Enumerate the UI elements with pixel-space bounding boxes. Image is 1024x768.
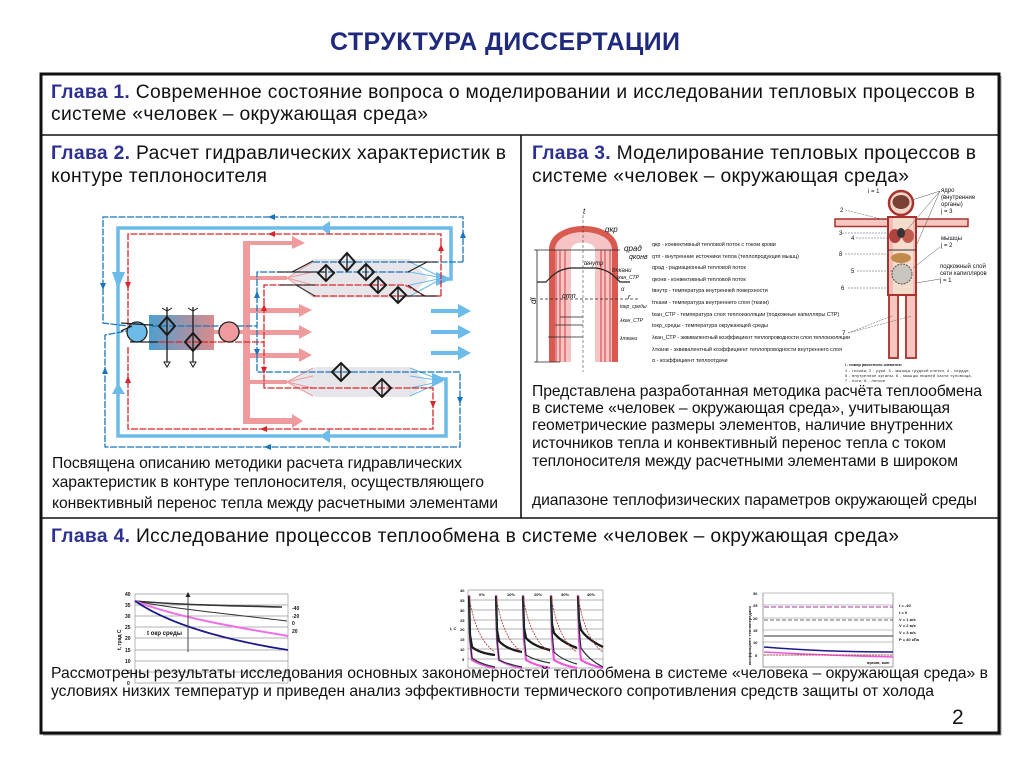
chapter 1 heading: системе «человек – окружающая среда»	[51, 104, 428, 125]
body labels: ядро	[941, 188, 955, 194]
body labels: 2	[840, 208, 844, 214]
chart: cooling curves by percent: 30	[460, 608, 465, 613]
chart: temperature vs time at ambient temperatures: 0	[292, 621, 295, 627]
figure labels: t	[583, 207, 586, 216]
chart: temperature vs time at ambient temperatures: 15	[125, 648, 131, 654]
chapter 3 heading	[532, 143, 976, 187]
human body model figure	[835, 188, 987, 383]
figure labels: qтп	[562, 293, 576, 300]
chapter 3 description: геометрические размеры элементов, наличие внутренних	[532, 417, 953, 434]
figure labels: tокр_среды	[620, 304, 647, 310]
chapter 2 heading: Глава 2. Расчет гидравлических характеристик в	[51, 143, 506, 164]
chart: cooling curves by percent: 10	[460, 647, 465, 652]
chapter 4 description	[51, 665, 988, 700]
hydraulic circuit diagram	[100, 214, 471, 450]
body labels: (внутренние	[941, 195, 976, 201]
chart: thermal resistance vs time: V = 1 м/с	[899, 617, 917, 622]
chart: temperature vs time at ambient temperatures: -20	[292, 614, 299, 620]
light blue return pipes	[118, 228, 451, 436]
chart: thermal resistance vs time: 5	[755, 653, 758, 658]
body labels: 8	[839, 252, 843, 258]
body labels: 6	[841, 286, 845, 292]
flow arrowheads	[100, 214, 466, 450]
chart: cooling curves by percent: 25	[460, 618, 465, 623]
chapter 3 description	[532, 383, 982, 509]
inlet and outlet connections	[162, 261, 437, 367]
body labels: 7	[842, 331, 846, 337]
chart: cooling curves by percent: 30%	[561, 592, 569, 597]
liver and intestines	[891, 253, 912, 284]
chart: cooling curves by percent	[450, 588, 603, 668]
legend of symbols: λкан_СТР - эквивалентный коэффициент теплопроводности слоя теплоизоляции	[652, 334, 850, 341]
legs	[889, 295, 916, 358]
valves	[159, 253, 406, 397]
arms	[835, 219, 968, 226]
body labels: 3	[839, 231, 843, 237]
element legend: 1 - голова, 2 - руки, 3 - мышцы грудной клетки, 4 - сердце,	[845, 369, 970, 373]
tube wall	[549, 226, 618, 362]
legend of symbols: qрад - радиационный тепловой поток	[652, 264, 747, 271]
legend of symbols: qкр - конвективный тепловой поток с током крови	[652, 241, 776, 248]
legend of symbols: α - коэффициент теплоотдачи	[652, 358, 728, 364]
chart: temperature vs time at ambient temperatures: 20	[125, 636, 131, 642]
element legend: 7 - ноги, 8 - легкие	[845, 379, 885, 383]
chart: cooling curves by percent: t, C	[450, 626, 457, 631]
pink and blue fine channels	[287, 262, 443, 396]
body labels: j = 2	[940, 243, 953, 249]
legend of symbols	[652, 241, 850, 364]
chart: temperature vs time at ambient temperatures	[117, 592, 299, 687]
blue heater gradient box	[149, 315, 214, 350]
chart: thermal resistance vs time	[747, 591, 920, 667]
body labels: 5	[851, 269, 855, 275]
chart: cooling curves by percent: 40	[460, 588, 465, 593]
chapter 3 description: Представлена разработанная методика расчёта теплообмена	[532, 383, 982, 400]
figure labels: qконв	[629, 254, 648, 261]
chapter 3 description: в системе «человек – окружающая среда», учитывающая	[532, 400, 950, 417]
chart: cooling curves by percent: 5	[462, 657, 465, 662]
title: СТРУКТУРА ДИССЕРТАЦИИ	[330, 28, 680, 56]
chapter 2 description: характеристик в контуре теплоносителя, осуществляющего	[52, 474, 484, 491]
chart: temperature vs time at ambient temperatures: t окр среды	[147, 631, 182, 637]
body labels	[839, 188, 987, 337]
chart: thermal resistance vs time: t = 0	[899, 610, 908, 615]
chapter 1 heading: Глава 1. Современное состояние вопроса о моделировании и исследовании тепловых процессов в	[51, 82, 975, 103]
figure labels: tткани	[612, 268, 632, 274]
chart: cooling curves by percent: 10%	[507, 592, 515, 597]
figure labels: tвнутр	[584, 261, 604, 267]
page number: 2	[952, 706, 964, 729]
chart: thermal resistance vs time: 25	[753, 603, 758, 608]
chart: thermal resistance vs time: V = 2 м/с	[899, 623, 917, 628]
chart: temperature vs time at ambient temperatures: 25	[125, 625, 131, 631]
figure labels: r	[628, 294, 631, 301]
chart: thermal resistance vs time: 30	[753, 591, 758, 596]
legend of symbols: tвнутр - температура внутренней поверхности	[652, 287, 768, 294]
body labels: j = 1	[939, 278, 952, 284]
chart: temperature vs time at ambient temperatures: 35	[125, 603, 131, 609]
legend of symbols: qтп - внутренние источники тепла (теплопродукция мышц)	[652, 254, 799, 260]
figure labels: qкр	[605, 225, 618, 234]
blue dashed loops	[103, 217, 463, 447]
chart: thermal resistance vs time: время, мин	[867, 660, 890, 665]
chart: thermal resistance vs time: V = 3 м/с	[899, 630, 917, 635]
legend of symbols: λткани - эквивалентный коэффициент теплопроводности внутреннего слоя	[652, 346, 842, 353]
chart: thermal resistance vs time: t = -40	[899, 603, 911, 608]
chart: temperature vs time at ambient temperatures: 5	[127, 670, 130, 676]
chapter 4 heading: Глава 4. Исследование процессов теплообмена в системе «человек – окружающая среда»	[51, 526, 899, 547]
body labels: подкожный слой	[940, 263, 986, 270]
chart: cooling curves by percent: 40%	[587, 592, 595, 597]
body labels: органы)	[941, 202, 963, 208]
body labels: сети капилляров	[940, 271, 987, 277]
chapter 2 description: конвективный перенос тепла между расчетными элементами	[52, 495, 498, 512]
chart: cooling curves by percent: 15	[460, 637, 465, 642]
chart: thermal resistance vs time: 15	[753, 628, 758, 633]
chapter 3 description: диапазоне теплофизических параметров окружающей среды	[532, 492, 977, 509]
chart: temperature vs time at ambient temperatures: -40	[292, 606, 299, 612]
figure labels	[529, 207, 648, 342]
chart: cooling curves by percent: 35	[460, 598, 465, 603]
chart: temperature vs time at ambient temperatures: 20	[292, 629, 298, 635]
circulation pumps	[121, 322, 239, 342]
figure labels: qрад	[624, 244, 642, 253]
chart: temperature vs time at ambient temperatures: t, град С	[117, 629, 123, 650]
wall cross-section figure	[529, 207, 648, 372]
chapter 3 heading: Глава 3. Моделирование тепловых процессов в	[532, 143, 976, 164]
gray heat exchanger zones	[287, 259, 428, 397]
body labels: мышцы	[941, 236, 962, 242]
chapter 3 heading: системе «человек – окружающая среда»	[532, 166, 909, 187]
figure labels: λкан_СТР	[619, 318, 644, 324]
chart: thermal resistance vs time: коэффициент теплопередачи	[747, 606, 752, 665]
leader lines	[842, 191, 940, 333]
chart: thermal resistance vs time: 10	[753, 640, 758, 645]
head with brain	[889, 191, 913, 215]
element legend	[845, 363, 972, 383]
chart: temperature vs time at ambient temperatures: 30	[125, 614, 131, 620]
chart: cooling curves by percent: 0%	[479, 592, 485, 597]
chapter 2 heading: контуре теплоносителя	[51, 166, 267, 187]
figure labels: λткани	[619, 336, 638, 342]
chapter 4 description: условиях низких температур и приведен анализ эффективности термического сопротивления средств защиты от холода	[51, 683, 934, 700]
light blue arrows	[112, 221, 471, 443]
chapter 2 heading	[51, 143, 506, 187]
pink supply pipes	[214, 236, 312, 428]
figure labels: dl	[529, 298, 538, 304]
chart: thermal resistance vs time: 20	[753, 616, 758, 621]
legend of symbols: tкан_СТР - температура слоя теплоизоляции (подкожные капилляры СТР)	[652, 312, 839, 318]
body labels: j = 3	[940, 209, 953, 215]
chart: thermal resistance vs time: P = 40 кПа	[899, 637, 920, 642]
body labels: 4	[851, 236, 855, 242]
chart: cooling curves by percent: 20%	[534, 592, 542, 597]
body labels: i = 1	[868, 189, 880, 195]
chart: cooling curves by percent: 20	[460, 627, 465, 632]
chapter 2 description: Посвящена описанию методики расчета гидравлических	[52, 455, 462, 472]
chapter 3 description: источников тепла и конвективный перенос тепла с током	[532, 435, 946, 452]
legend of symbols: qконв - конвективный тепловой поток	[652, 276, 746, 283]
chapter 4 description: Рассмотрены результаты исследования основных закономерностей теплообмена в системе «человека – окружающая среда» в	[51, 665, 988, 682]
legend of symbols: tокр_среды - температура окружающей среды	[652, 322, 768, 329]
chapter 3 description: теплоносителя между расчетными элементами в широком	[532, 453, 958, 470]
red dashed loops	[128, 234, 441, 429]
legend of symbols: tткани - температура внутреннего слоя (ткани)	[652, 300, 769, 306]
chart: temperature vs time at ambient temperatures: 40	[125, 592, 131, 598]
temperature curve and axes	[534, 215, 640, 372]
element legend: i - номер расчетного элемента:	[845, 363, 902, 367]
element legend: 5 - внутренние органы, 6 - мышцы нижней части туловища,	[845, 374, 972, 378]
chapter 2 description	[52, 455, 498, 512]
figure labels: tкан_СТР	[617, 275, 640, 281]
torso	[888, 217, 916, 295]
chapter 1 heading	[51, 82, 975, 125]
heart and lungs	[889, 228, 914, 243]
figure labels: α	[621, 287, 625, 293]
chart: temperature vs time at ambient temperatures: 10	[125, 659, 131, 665]
chart: temperature vs time at ambient temperatures: 0	[127, 681, 130, 687]
